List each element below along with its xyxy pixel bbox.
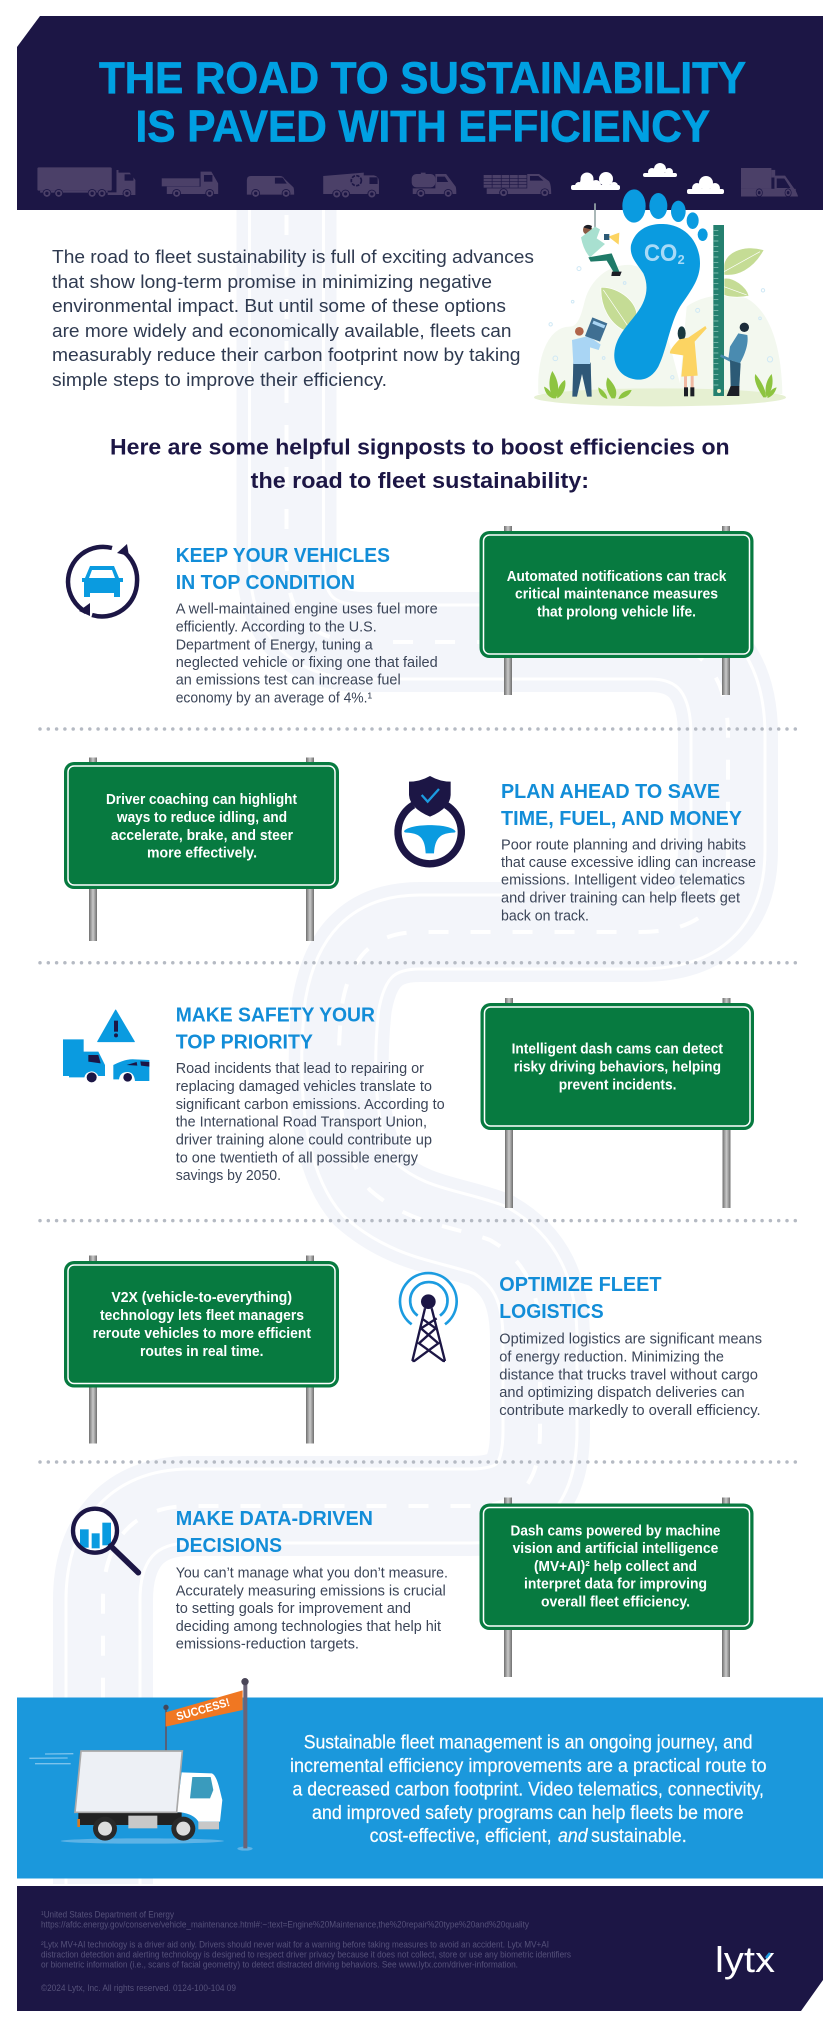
signpost: (MV+AI)² help collect and [534,1559,697,1575]
recycling truck [323,173,379,198]
signpost: accelerate, brake, and steer [111,828,293,844]
icon: car with cycle arrows [68,544,137,616]
body text: an emissions test can increase fuel [176,673,401,689]
body text: significant carbon emissions. According to [176,1097,445,1113]
body text: efficiently. According to the U.S. [176,619,377,635]
body text [176,1061,445,1184]
title: IS PAVED WITH EFFICIENCY [136,102,710,152]
signpost: that prolong vehicle life. [537,604,696,620]
conclusion text: cost-effective, efficient, [370,1826,552,1847]
signpost [480,1498,754,1677]
signpost [480,998,754,1208]
title [99,54,746,152]
signpost: ways to reduce idling, and [116,810,287,826]
body text: and optimizing dispatch deliveries can [499,1385,745,1401]
body text [501,837,756,924]
conclusion text: Sustainable fleet management is an ongoing journey, and [304,1732,753,1753]
intro paragraph: are more widely and economically available, fleets can [52,320,512,341]
CO2 label: CO [644,240,677,267]
small flag pole [163,1705,169,1752]
signpost: critical maintenance measures [515,587,718,603]
footnotes: distraction detection and alerting technology is designed to respect driver privacy because it does not collect, store or use any biometric identifiers [41,1950,571,1960]
signpost: vision and artificial intelligence [513,1541,718,1557]
intro paragraph: environmental impact. But until some of these options [52,295,506,316]
flatbed truck [484,174,551,197]
person with calculator [572,317,607,397]
body text: Accurately measuring emissions is crucial [176,1583,446,1599]
cloud 2 [643,163,677,177]
dump truck [162,172,218,198]
icon: signal tower [400,1273,457,1361]
success flag [166,1690,243,1727]
section heading [110,434,730,493]
signpost: Dash cams powered by machine [510,1523,720,1539]
conclusion text: and improved safety programs can help fleets be more [312,1803,744,1824]
signpost: routes in real time. [140,1344,264,1360]
hills and ground [534,265,786,406]
body text [176,1566,448,1653]
heading: TOP PRIORITY [176,1031,313,1054]
body text: of energy reduction. Minimizing the [499,1350,724,1366]
tanker truck [412,173,456,198]
truck [75,1751,222,1841]
body text: back on track. [501,908,589,924]
section heading: the road to fleet sustainability: [251,468,589,493]
signpost: overall fleet efficiency. [541,1594,690,1610]
body text: to setting goals for improvement and [176,1601,411,1617]
woman pointing [670,326,707,396]
conclusion text: sustainable. [591,1826,687,1847]
climber with megaphone [581,203,622,276]
panel: plan ahead [64,758,756,941]
heading: DECISIONS [176,1534,282,1557]
heading: IN TOP CONDITION [176,571,355,594]
intro paragraph [52,246,534,390]
heading [176,1004,375,1054]
CO2 label: 2 [678,253,685,267]
intro paragraph: measurably reduce their carbon footprint now by taking [52,344,520,365]
heading: OPTIMIZE FLEET [499,1273,662,1296]
large pole [237,1678,253,1851]
body text: savings by 2050. [176,1168,281,1184]
heading: MAKE DATA-DRIVEN [176,1507,373,1530]
signpost: risky driving behaviors, helping [514,1059,721,1075]
body text: A well-maintained engine uses fuel more [176,602,438,618]
fleet vehicle silhouettes [37,167,551,198]
heading: KEEP YOUR VEHICLES [176,544,390,567]
signpost: V2X (vehicle-to-everything) [111,1290,292,1306]
body text: contribute markedly to overall efficiency. [499,1403,761,1419]
icon: steering wheel with shield [398,776,461,864]
header banner [17,16,823,210]
signpost: reroute vehicles to more efficient [93,1326,311,1342]
speed lines [29,1754,73,1764]
footer [17,1886,823,2011]
heading [176,1507,373,1557]
body text: neglected vehicle or fixing one that failed [176,655,438,671]
intro paragraph: that show long-term promise in minimizing negative [52,271,492,292]
body text: that cause excessive idling can increase [501,855,756,871]
bubbles [549,267,773,379]
panel: make safety your top priority [63,998,754,1208]
heading [499,1273,662,1323]
cloud 1 [571,172,620,190]
title: THE ROAD TO SUSTAINABILITY [99,54,746,103]
body text: and driver training can help fleets get [501,890,740,906]
man measuring [720,323,749,396]
van [247,176,294,198]
heading: LOGISTICS [499,1300,604,1323]
leaves [601,248,764,330]
body text: deciding among technologies that help hit [176,1619,441,1635]
ruler [713,225,724,396]
signpost: Intelligent dash cams can detect [512,1041,723,1057]
CO2 footprint illustration [534,189,786,406]
signpost [64,758,339,941]
conclusion text: a decreased carbon footprint. Video telematics, connectivity, [292,1779,764,1800]
plants [544,371,777,399]
signpost [64,1256,339,1444]
body text: Poor route planning and driving habits [501,837,746,853]
intro paragraph: simple steps to improve their efficiency. [52,369,387,390]
intro paragraph: The road to fleet sustainability is full of exciting advances [52,246,534,267]
heading: MAKE SAFETY YOUR [176,1004,375,1026]
signpost [480,526,754,695]
lytx logo: lytx [715,1939,775,1980]
body text: Road incidents that lead to repairing or [176,1061,424,1077]
body text: You can’t manage what you don’t measure. [176,1566,448,1582]
conclusion text: incremental efficiency improvements are a practical route to [290,1756,766,1777]
footnotes: ©2024 Lytx, Inc. All rights reserved. 0124-100-104 09 [41,1983,236,1993]
footprint [614,189,708,380]
semi truck [37,167,135,198]
signpost: technology lets fleet managers [100,1308,304,1324]
heading: PLAN AHEAD TO SAVE [501,780,720,803]
background winding road [103,205,728,1884]
section heading: Here are some helpful signposts to boost efficiencies on [110,434,730,460]
panel: keep vehicles in top condition [68,526,753,706]
signpost: more effectively. [147,846,257,862]
icon: truck, car and warning triangle [63,1010,149,1082]
heading [176,544,390,594]
body text: replacing damaged vehicles translate to [176,1079,432,1095]
box truck [741,168,798,197]
body text [499,1332,762,1419]
panel: optimize fleet logistics [64,1256,762,1444]
body text: economy by an average of 4%.¹ [176,690,372,706]
conclusion text [290,1732,766,1847]
icon: magnifying glass with bars [73,1509,138,1573]
heading [501,780,742,830]
conclusion banner [17,1678,823,1878]
conclusion text: and [558,1826,589,1847]
body text: the International Road Transport Union, [176,1115,427,1131]
footnotes [41,1910,571,1993]
body text [176,602,438,706]
footnotes: ²Lytx MV+AI technology is a driver aid only. Drivers should never wait for a warning before taking measures to avoid an accident. Lytx MV+AI [41,1940,549,1950]
signpost: prevent incidents. [559,1078,676,1094]
heading: TIME, FUEL, AND MONEY [501,807,742,830]
success flag: SUCCESS! [175,1696,231,1724]
signpost: Automated notifications can track [507,569,727,585]
cloud 3 [687,176,724,194]
footnotes: ¹United States Department of Energy [41,1910,174,1920]
footnotes: or biometric information (i.e., scans of facial geometry) to detect distracted driving behaviors. See www.lytx.com/driver-information. [41,1960,518,1970]
panel: make data-driven decisions [73,1498,753,1677]
footnotes: https://afdc.energy.gov/conserve/vehicle_maintenance.html#:~:text=Engine%20Maintenance,the%20repair%20type%20and%20quality [41,1920,529,1930]
body text: distance that trucks travel without cargo [499,1368,758,1384]
body text: driver training alone could contribute up [176,1133,432,1149]
body text: to one twentieth of all possible energy [176,1150,419,1166]
signpost: Driver coaching can highlight [106,792,297,808]
body text: Department of Energy, tuning a [176,637,373,653]
body text: Optimized logistics are significant means [499,1332,762,1348]
body text: emissions-reduction targets. [176,1637,359,1653]
truck with success flag [29,1678,253,1851]
signpost: interpret data for improving [524,1577,707,1593]
body text: emissions. Intelligent video telematics [501,873,745,889]
